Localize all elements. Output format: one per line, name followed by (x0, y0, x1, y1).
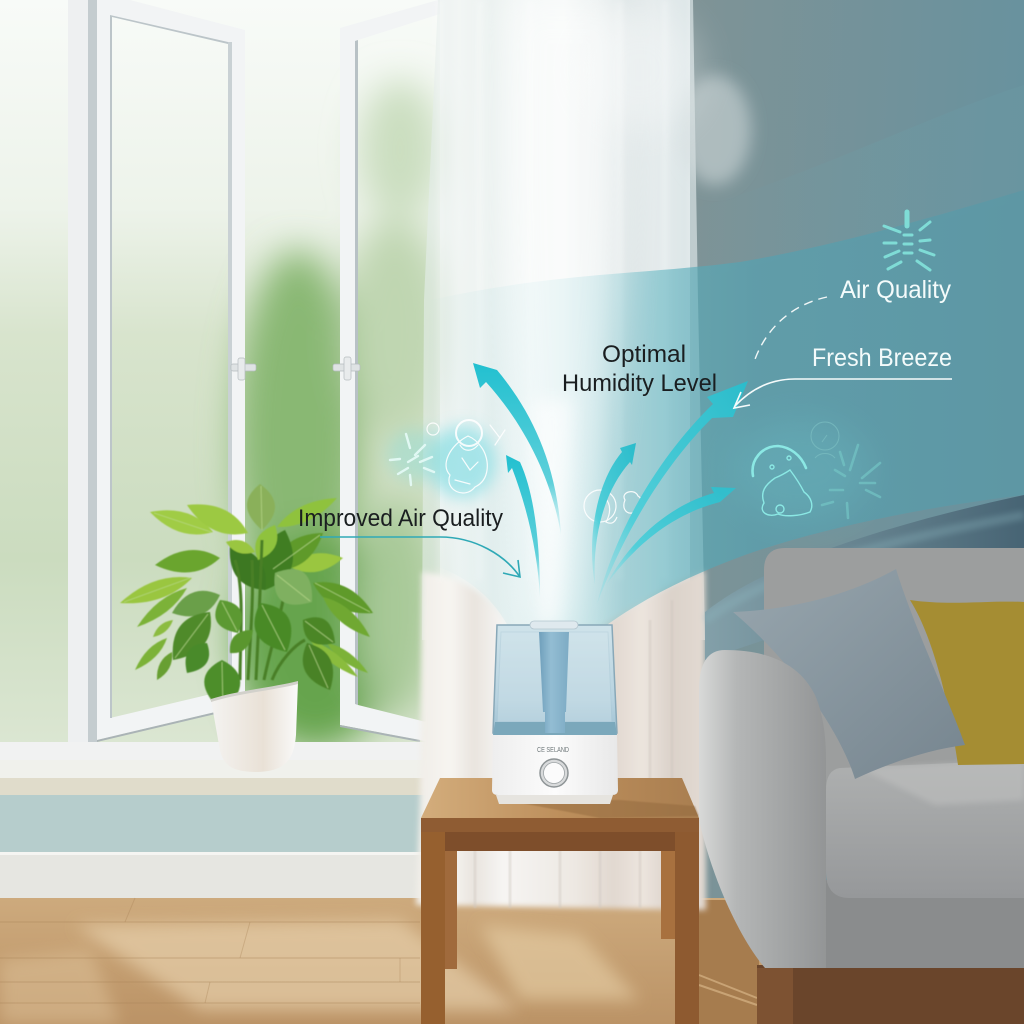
teal air flow bands (422, 85, 1024, 660)
window: right open panel (333, 0, 440, 745)
sofa back (764, 548, 1024, 800)
arrow: short right mist arrow (592, 443, 636, 585)
water tank (493, 625, 617, 733)
background: wall on the right (690, 0, 1024, 900)
plant leaves (120, 484, 373, 713)
illustration: right particle cluster (730, 420, 880, 520)
arrow: long right mist arrow (597, 381, 748, 604)
outdoor view through window (0, 0, 445, 750)
yellow pillow (910, 600, 1024, 765)
plant stems (235, 540, 305, 680)
tank water level (493, 722, 617, 735)
mist lid (530, 621, 578, 629)
white pot (211, 682, 298, 772)
control knob (540, 759, 568, 787)
arrow: improved air quality (320, 537, 520, 577)
potted plant (120, 484, 373, 772)
table (421, 778, 699, 1024)
sofa arm (699, 650, 826, 968)
label: optimal humidity level: Humidity Level (562, 370, 717, 397)
dashed connector from air quality (754, 297, 827, 362)
illustration: left particle cluster (387, 420, 505, 498)
window: left fixed frame (68, 0, 97, 745)
sofa (699, 548, 1024, 1024)
tank inner glass edges (497, 632, 612, 722)
centre tube (539, 632, 569, 733)
window: left open panel (97, 0, 256, 742)
sofa leg (757, 968, 793, 1024)
wooden floor (0, 898, 1024, 1024)
humidifier (492, 621, 618, 804)
sofa seat cushion (826, 760, 1024, 898)
label: optimal humidity level (562, 341, 717, 397)
arrow: lower right mist arrow (606, 487, 736, 585)
label: air quality: Air Quality (840, 276, 951, 304)
base foot (496, 795, 613, 804)
arrow: tall left mist arrow (473, 363, 561, 535)
window sill and lower wall (0, 742, 440, 899)
curtain (416, 0, 706, 910)
white base (492, 735, 618, 795)
illustration: centre bubbles (584, 490, 641, 523)
icon: air quality burst (884, 212, 934, 270)
label: fresh breeze: Fresh Breeze (812, 344, 952, 372)
label: improved air quality: Improved Air Quality (298, 505, 503, 532)
label: optimal humidity level: Optimal (602, 341, 686, 368)
brand mark: CE SELAND (537, 747, 569, 754)
sofa base (820, 880, 1024, 968)
arrow: fresh breeze (734, 379, 952, 408)
grey pillow (733, 569, 965, 779)
arrow: short left mist arrow (506, 455, 540, 598)
front drooping leaf (204, 660, 240, 713)
mist plume rising from humidifier (503, 0, 751, 625)
